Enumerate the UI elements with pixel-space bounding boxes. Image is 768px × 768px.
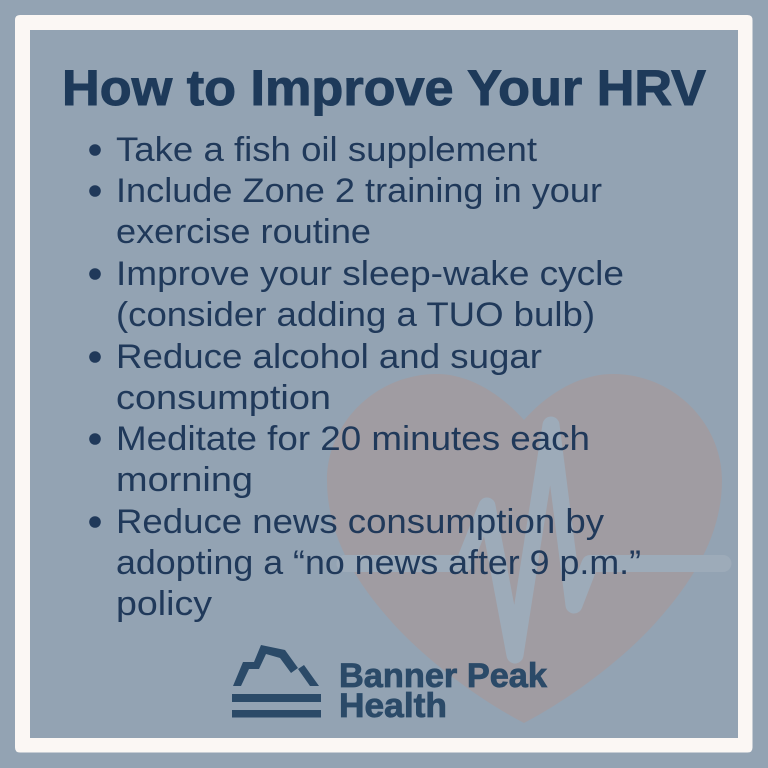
bullet 4: consumption <box>116 379 331 417</box>
bullet 6 <box>89 503 641 623</box>
bullet 4 <box>89 338 542 417</box>
bullet 6: policy <box>116 585 212 623</box>
bullet 2 <box>89 172 602 251</box>
pulse line <box>345 425 723 655</box>
bullet 2: Include Zone 2 training in your <box>116 172 602 210</box>
title: How to Improve Your HRV <box>62 60 707 116</box>
bullet 5 <box>89 420 590 499</box>
logo wordmark: Banner Peak <box>339 657 547 695</box>
heart <box>327 374 722 723</box>
logo wordmark: Health <box>339 687 447 725</box>
icon: mountain <box>232 645 321 718</box>
bullet 3: Improve your sleep-wake cycle <box>116 255 624 293</box>
bullet list <box>89 131 641 623</box>
icon: heart with pulse line <box>327 374 723 723</box>
bullet 4: Reduce alcohol and sugar <box>116 338 542 376</box>
bullet 3: (consider adding a TUO bulb) <box>116 296 595 334</box>
bullet 5: morning <box>116 461 253 499</box>
logo: Banner Peak Health <box>232 645 547 725</box>
bullet 6: Reduce news consumption by <box>116 503 604 541</box>
bullet 1: Take a fish oil supplement <box>116 131 538 169</box>
bullet 2: exercise routine <box>116 213 371 251</box>
logo wordmark <box>339 657 547 725</box>
bullet 5: Meditate for 20 minutes each <box>116 420 590 458</box>
bullet 3 <box>89 255 624 334</box>
bullet 6: adopting a “no news after 9 p.m.” <box>116 544 641 582</box>
